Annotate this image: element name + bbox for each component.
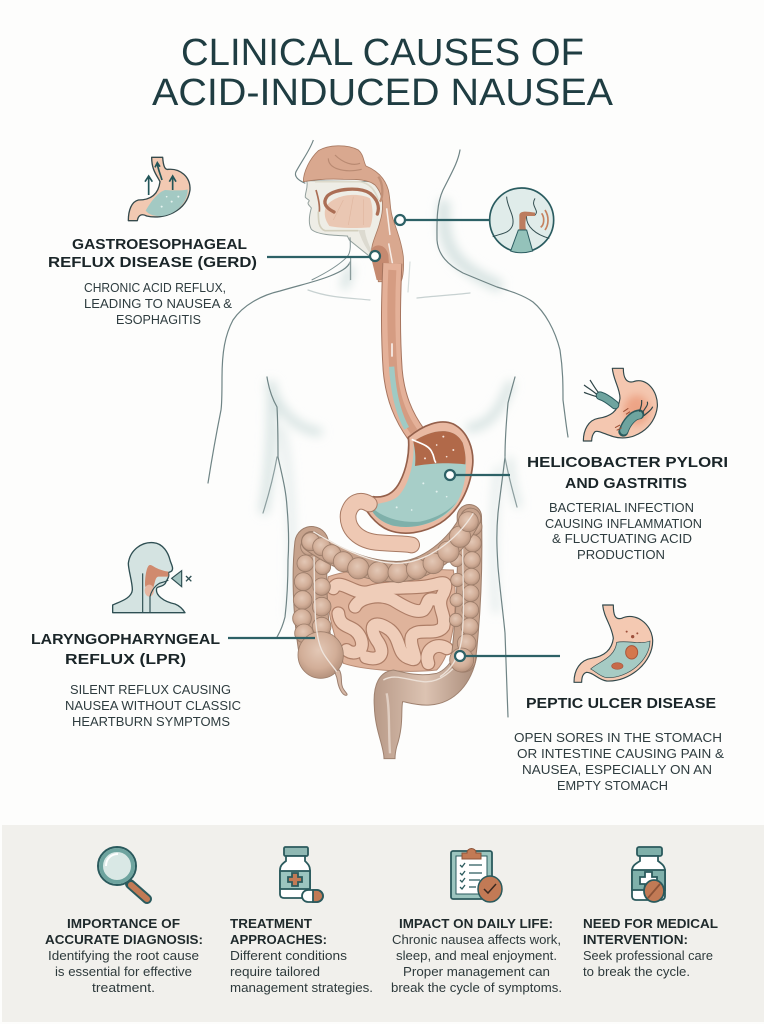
text: treatment approaches: TREATMENT: [230, 916, 312, 931]
body silhouette: [208, 150, 568, 717]
title: ACID-INDUCED NAUSEA: [152, 72, 614, 114]
text: need for medical intervention: Seek professional care: [583, 949, 713, 963]
GERD label: GASTROESOPHAGEAL: [72, 237, 247, 253]
text: importance of accurate diagnosis: is essential for effective: [55, 965, 192, 979]
neck front line: [312, 237, 351, 280]
icon: medicine bottle with tablet: [632, 847, 665, 902]
forehead line: [295, 140, 313, 183]
LPR label: LARYNGOPHARYNGEAL: [31, 632, 220, 648]
face profile: [305, 181, 383, 257]
descending colon: [463, 517, 470, 660]
text: treatment approaches: [230, 916, 373, 995]
icon: H. pylori stomach: [583, 368, 657, 441]
text: treatment approaches: Different conditions: [230, 949, 347, 963]
text: impact on daily life: sleep, and meal enjoyment.: [396, 949, 557, 963]
icon: throat circle: [490, 188, 554, 253]
text: impact on daily life: [391, 916, 562, 995]
text: need for medical intervention: NEED FOR MEDICAL: [583, 916, 718, 931]
text: importance of accurate diagnosis: ACCURATE DIAGNOSIS:: [45, 932, 203, 947]
nasal cavity and pharynx: [303, 146, 404, 282]
H. pylori label: HELICOBACTER PYLORI: [527, 455, 728, 471]
GERD label: CHRONIC ACID REFLUX,: [84, 281, 226, 295]
leader line: GERD: [267, 251, 380, 261]
text: need for medical intervention: to break the cycle.: [583, 965, 690, 979]
sigmoid and rectum: [374, 653, 477, 759]
esophagus: [391, 263, 417, 435]
leader line: throat: [395, 215, 490, 225]
title: [152, 32, 614, 114]
text: impact on daily life: IMPACT ON DAILY LIFE:: [399, 916, 553, 931]
text: need for medical intervention: [583, 916, 718, 979]
text: treatment approaches: require tailored: [230, 965, 320, 979]
leader line: H. pylori: [445, 470, 510, 480]
text: need for medical intervention: INTERVENTION:: [583, 932, 688, 947]
peptic ulcer label: NAUSEA, ESPECIALLY ON AN: [522, 763, 712, 777]
text: importance of accurate diagnosis: IMPORTANCE OF: [67, 916, 180, 931]
LPR label: [31, 632, 241, 729]
icon: clipboard with check badge: [451, 848, 502, 902]
leader line: peptic ulcer: [455, 651, 560, 661]
GERD label: [48, 237, 257, 327]
text: treatment approaches: APPROACHES:: [230, 932, 327, 947]
GERD label: REFLUX DISEASE (GERD): [48, 255, 257, 271]
H. pylori label: PRODUCTION: [577, 548, 665, 562]
palate: [325, 189, 378, 214]
peptic ulcer label: EMPTY STOMACH: [557, 779, 668, 793]
text: impact on daily life: Chronic nausea affects work,: [392, 933, 561, 947]
text: impact on daily life: break the cycle of symptoms.: [391, 981, 562, 995]
icon: magnifying glass: [98, 847, 147, 899]
text: importance of accurate diagnosis: [45, 916, 203, 995]
small intestine: [327, 568, 455, 671]
tongue: [325, 195, 372, 228]
icon: peptic ulcer stomach: [574, 605, 653, 682]
intestines: [293, 512, 482, 759]
GERD label: LEADING TO NAUSEA &: [84, 297, 233, 311]
peptic ulcer label: [514, 696, 725, 793]
icon: LPR head profile: [113, 543, 191, 613]
H. pylori label: & FLUCTUATING ACID: [552, 532, 692, 546]
icon: GERD stomach with arrows: [128, 157, 190, 221]
text: importance of accurate diagnosis: treatment.: [92, 981, 155, 995]
head and throat anatomy: [295, 140, 404, 282]
H. pylori label: AND GASTRITIS: [565, 476, 687, 492]
text: treatment approaches: management strategies.: [230, 981, 373, 995]
H. pylori label: BACTERIAL INFECTION: [549, 501, 694, 515]
leader line: LPR: [228, 637, 315, 639]
peptic ulcer label: OPEN SORES IN THE STOMACH: [514, 731, 722, 745]
LPR label: REFLUX (LPR): [65, 652, 186, 668]
ascending colon and cecum: [310, 543, 315, 647]
transverse colon: [312, 518, 471, 572]
peptic ulcer label: OR INTESTINE CAUSING PAIN &: [517, 747, 725, 761]
text: importance of accurate diagnosis: Identifying the root cause: [48, 949, 199, 963]
H. pylori label: CAUSING INFLAMMATION: [545, 517, 702, 531]
LPR label: HEARTBURN SYMPTOMS: [72, 715, 230, 729]
icon: pill bottle with capsule: [280, 847, 323, 902]
title: CLINICAL CAUSES OF: [181, 32, 584, 74]
LPR label: NAUSEA WITHOUT CLASSIC: [65, 699, 241, 713]
duodenum: [348, 501, 412, 545]
text: impact on daily life: Proper management can: [403, 965, 550, 979]
H. pylori label: [527, 455, 728, 562]
peptic ulcer label: PEPTIC ULCER DISEASE: [526, 696, 716, 712]
LPR label: SILENT REFLUX CAUSING: [70, 683, 231, 697]
panel: bottom summary band: [2, 825, 764, 1022]
GERD label: ESOPHAGITIS: [116, 313, 201, 327]
stomach: [367, 422, 473, 533]
